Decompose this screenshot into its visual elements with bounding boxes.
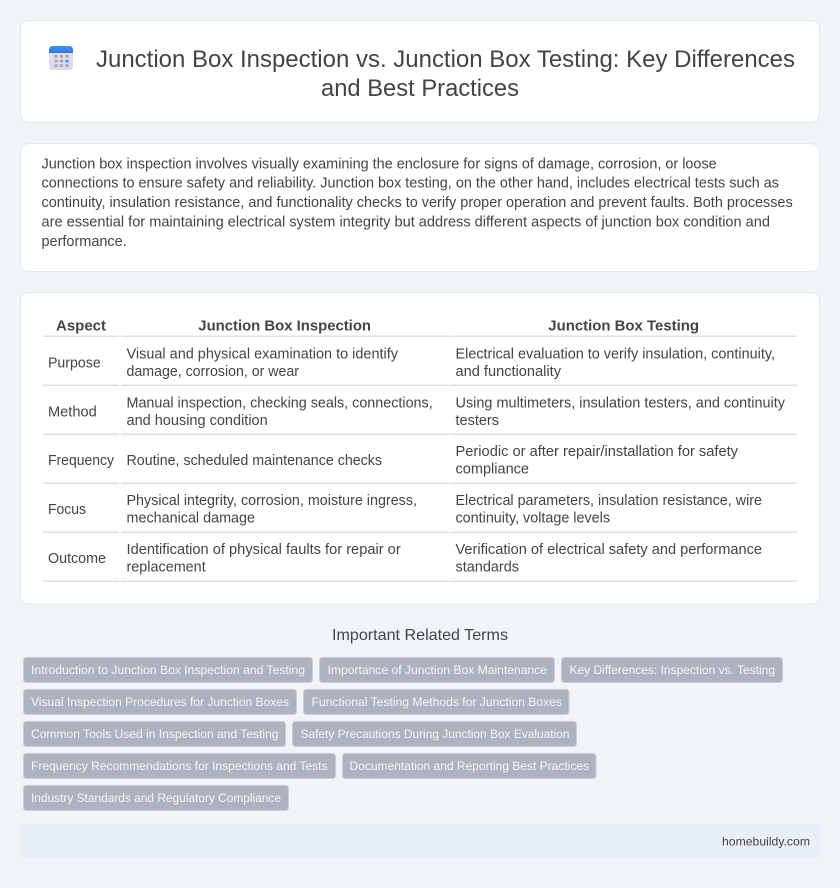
tag: Introduction to Junction Box Inspection and Testing <box>31 663 305 677</box>
table row: focus: mechanical damage <box>126 511 255 527</box>
tag: Common Tools Used in Inspection and Testing <box>31 727 278 741</box>
table row: method <box>43 395 797 435</box>
tag <box>320 658 554 682</box>
tag <box>292 722 576 746</box>
related term tags <box>24 658 782 810</box>
table row: method: Manual inspection, checking seals, connections, <box>126 395 433 411</box>
tag: Safety Precautions During Junction Box Evaluation <box>300 727 570 741</box>
table row: frequency: compliance <box>456 462 529 478</box>
table row: purpose: Visual and physical examination to identify <box>126 346 399 362</box>
table row: outcome <box>43 542 797 582</box>
table row: focus: Focus <box>48 502 86 518</box>
footer <box>20 824 820 858</box>
tag: Industry Standards and Regulatory Compliance <box>31 791 281 805</box>
table row: method: Method <box>48 404 97 420</box>
icon: calendar <box>49 46 73 70</box>
table row: outcome: Identification of physical faults for repair or <box>126 542 401 558</box>
table row: frequency: Periodic or after repair/installation for safety <box>456 444 739 460</box>
table row: purpose: and functionality <box>456 364 562 380</box>
title: and Best Practices <box>321 75 519 102</box>
tag: Frequency Recommendations for Inspections and Tests <box>31 759 328 773</box>
table header row: Junction Box Inspection <box>198 319 371 335</box>
tag <box>24 722 286 746</box>
panel: introduction <box>20 144 820 272</box>
tag <box>342 754 596 778</box>
tag: Functional Testing Methods for Junction Boxes <box>312 695 562 709</box>
table row: outcome: Verification of electrical safety and performance <box>456 542 762 558</box>
text block: introduction paragraph: connections to ensure safety and reliability. Junction box testing, on the other hand, includes electrical tests such as <box>42 176 779 192</box>
table row: focus: Electrical parameters, insulation resistance, wire <box>456 493 762 509</box>
table row: method: and housing condition <box>126 413 268 429</box>
text block: introduction paragraph: Junction box inspection involves visually examining the enclosure for signs of damage, corrosion, or loose <box>42 156 717 172</box>
table row: frequency: Routine, scheduled maintenance checks <box>126 453 382 469</box>
table row: method: testers <box>456 413 499 429</box>
title: Junction Box Inspection vs. Junction Box Testing: Key Differences <box>96 46 795 73</box>
table row: focus: Physical integrity, corrosion, moisture ingress, <box>126 493 417 509</box>
table row: purpose <box>43 346 797 386</box>
heading: important related terms: Important Related Terms <box>332 627 508 644</box>
table row: purpose: damage, corrosion, or wear <box>126 364 299 380</box>
tag <box>304 690 569 714</box>
table header row: Junction Box Testing <box>548 319 699 335</box>
tag <box>24 786 288 810</box>
footer: homebuildy.com <box>722 834 810 848</box>
tag: Documentation and Reporting Best Practices <box>350 759 589 773</box>
text block: introduction paragraph: are essential for maintaining electrical system integrity but address different aspects of junction box condition and <box>42 215 770 231</box>
table row: focus <box>43 493 797 533</box>
panel: header <box>20 20 820 122</box>
tag: Importance of Junction Box Maintenance <box>328 663 547 677</box>
table header row <box>43 319 797 337</box>
title <box>96 46 795 102</box>
table row: outcome: standards <box>456 560 519 576</box>
text block: introduction paragraph: performance. <box>42 234 127 250</box>
table row: frequency: Frequency <box>48 453 115 469</box>
table row: focus: continuity, voltage levels <box>456 511 610 527</box>
tag <box>24 690 296 714</box>
table row: frequency <box>43 444 797 484</box>
table row: outcome: replacement <box>126 560 206 576</box>
tag: Visual Inspection Procedures for Junction Boxes <box>31 695 289 709</box>
tag <box>24 754 336 778</box>
table row: outcome: Outcome <box>48 551 106 567</box>
tag <box>24 658 312 682</box>
table header row: Aspect <box>56 319 106 335</box>
panel: comparison table <box>20 292 820 604</box>
tag <box>562 658 782 682</box>
tag: Key Differences: Inspection vs. Testing <box>570 663 775 677</box>
text block: introduction paragraph <box>42 156 793 250</box>
table row: method: Using multimeters, insulation testers, and continuity <box>456 395 786 411</box>
table row: purpose: Electrical evaluation to verify insulation, continuity, <box>456 346 775 362</box>
table row: purpose: Purpose <box>48 355 101 371</box>
text block: introduction paragraph: continuity, insulation resistance, and functionality checks to verify proper operation and prevent faults. Both processes <box>42 195 793 211</box>
